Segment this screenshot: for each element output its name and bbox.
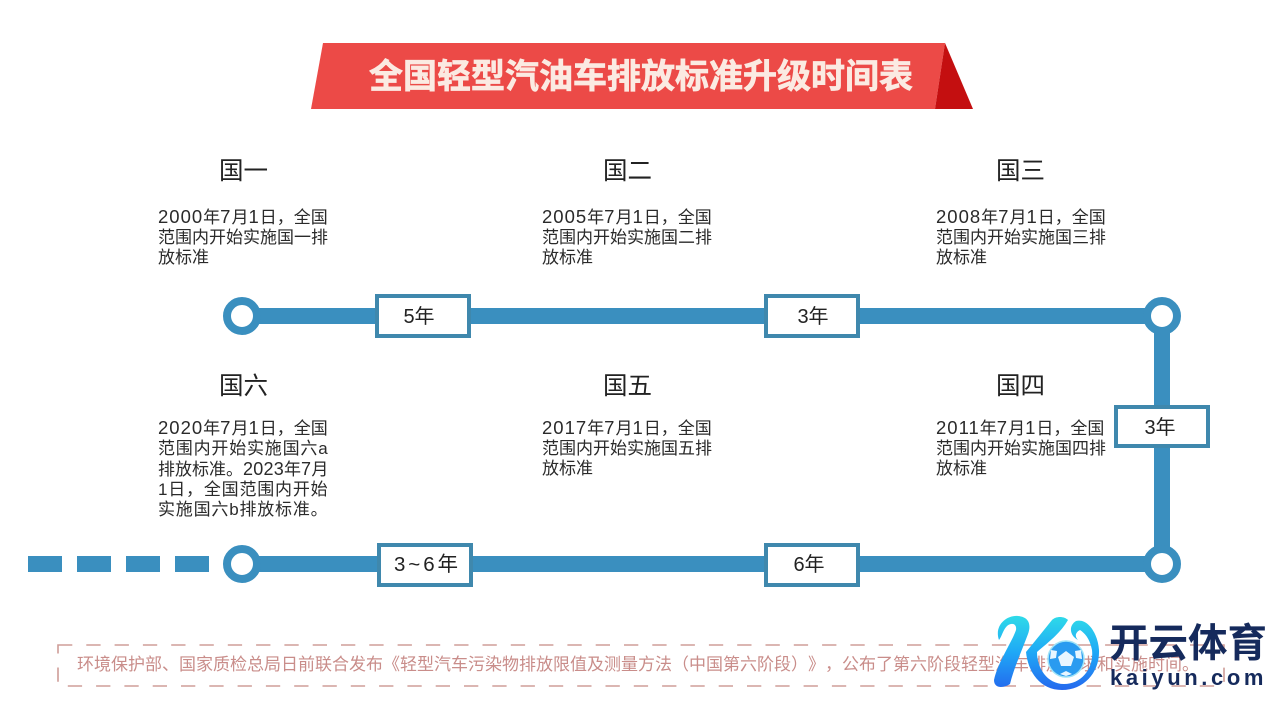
- text: 国六: 1日，全国范围内开始: [158, 480, 328, 499]
- title banner: 全国轻型汽油车排放标准升级时间表: [369, 58, 913, 96]
- watermark logo: [994, 616, 1267, 690]
- icon: football: [1048, 641, 1084, 677]
- text: 国四: 范围内开始实施国四排: [936, 439, 1106, 458]
- icon: K arm and swirl: [1026, 617, 1099, 690]
- timeline track: [242, 316, 1162, 564]
- text: 国六: 实施国六b排放标准。: [158, 500, 328, 519]
- timeline: [28, 294, 1210, 587]
- text: 国一: 2000年7月1日，全国: [158, 206, 328, 227]
- dashed past segment: [28, 556, 209, 572]
- interval box: 5年: 5年: [403, 305, 435, 328]
- text: 国六: 范围内开始实施国六a: [158, 439, 328, 458]
- text: 国五: [542, 417, 712, 478]
- text: 国五: 放标准: [542, 459, 593, 478]
- text: 国二: 范围内开始实施国二排: [542, 228, 712, 247]
- heading: 国一: 国一: [219, 158, 268, 185]
- heading: 国六: 国六: [219, 373, 268, 400]
- heading: 国五: 国五: [603, 373, 652, 400]
- text: 国五: 2017年7月1日，全国: [542, 417, 712, 438]
- text: 国四: 2011年7月1日，全国: [936, 417, 1104, 438]
- heading: 国二: 国二: [603, 158, 652, 185]
- text: 国六: 2020年7月1日，全国: [158, 417, 328, 438]
- text: 国三: [936, 206, 1106, 267]
- text: 国五: 范围内开始实施国五排: [542, 439, 712, 458]
- logo text: 开云体育: [1109, 622, 1267, 666]
- text: 国二: [542, 206, 712, 267]
- text: 国四: 放标准: [936, 459, 987, 478]
- text: 国六: [158, 417, 328, 519]
- text: 国三: 范围内开始实施国三排: [936, 228, 1106, 247]
- text: 国二: 放标准: [542, 248, 593, 267]
- interval box: 3年 top: 3年: [797, 305, 829, 328]
- heading: 国四: 国四: [996, 373, 1045, 400]
- text: 国一: [158, 206, 328, 267]
- interval box: 6年: 6年: [793, 553, 825, 576]
- text: 国三: 2008年7月1日，全国: [936, 206, 1106, 227]
- text: 国三: 放标准: [936, 248, 987, 267]
- node markers: [227, 301, 1177, 579]
- interval box: 3~6年: [379, 545, 471, 585]
- heading: 国三: 国三: [996, 158, 1045, 185]
- interval box: 3年 right: 3年: [1144, 416, 1176, 439]
- text: 国一: 范围内开始实施国一排: [158, 228, 328, 247]
- text: 国一: 放标准: [158, 248, 209, 267]
- interval box: 3年 top: [766, 296, 858, 336]
- interval box: 5年: [377, 296, 469, 336]
- footnote box: 环境保护部、国家质检总局日前联合发布《轻型汽车污染物排放限值及测量方法（中国第六阶段）》，公布了第六阶段轻型汽车排放要求和实施时间。: [77, 655, 1199, 674]
- text: 国六: 排放标准。2023年7月: [158, 459, 328, 479]
- interval box: 3~6年: 3~6年: [394, 553, 458, 576]
- icon: K stem: [994, 616, 1029, 687]
- interval box: 6年: [766, 545, 858, 585]
- interval box: 3年 right: [1116, 407, 1208, 446]
- title banner: [311, 43, 973, 109]
- footnote box: [57, 644, 1225, 687]
- text: 国二: 2005年7月1日，全国: [542, 206, 712, 227]
- logo url: kaiyun.com: [1110, 665, 1267, 690]
- text: 国四: [936, 417, 1106, 478]
